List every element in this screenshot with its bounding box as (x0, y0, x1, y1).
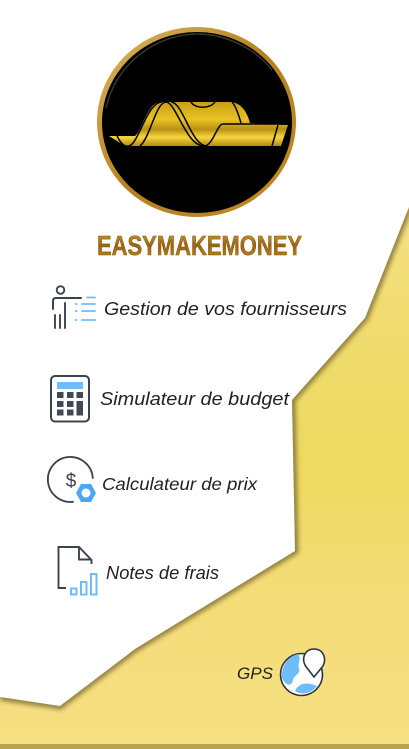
label: Calculateur de prix: Calculateur de prix (102, 474, 258, 494)
icon: dollar coin with hex nut: $ (66, 471, 77, 492)
logo: gold ring badge (97, 27, 296, 217)
label: Notes de frais: Notes de frais (106, 563, 219, 583)
label: GPS: GPS (237, 664, 274, 683)
label: Simulateur de budget: Simulateur de budget (100, 389, 290, 409)
icon: document with bars (58, 547, 96, 594)
brand name: EASYMAKEMONEY (97, 230, 302, 261)
icon: globe with map pin (280, 649, 325, 696)
panel: yellow rising background (0, 207, 409, 749)
icon: gold ribbon wave (109, 102, 288, 146)
icon: calculator (51, 376, 89, 422)
icon: person presenting list (53, 286, 95, 328)
icon: dollar coin with hex nut (48, 457, 96, 502)
label: Gestion de vos fournisseurs: Gestion de vos fournisseurs (104, 299, 347, 319)
